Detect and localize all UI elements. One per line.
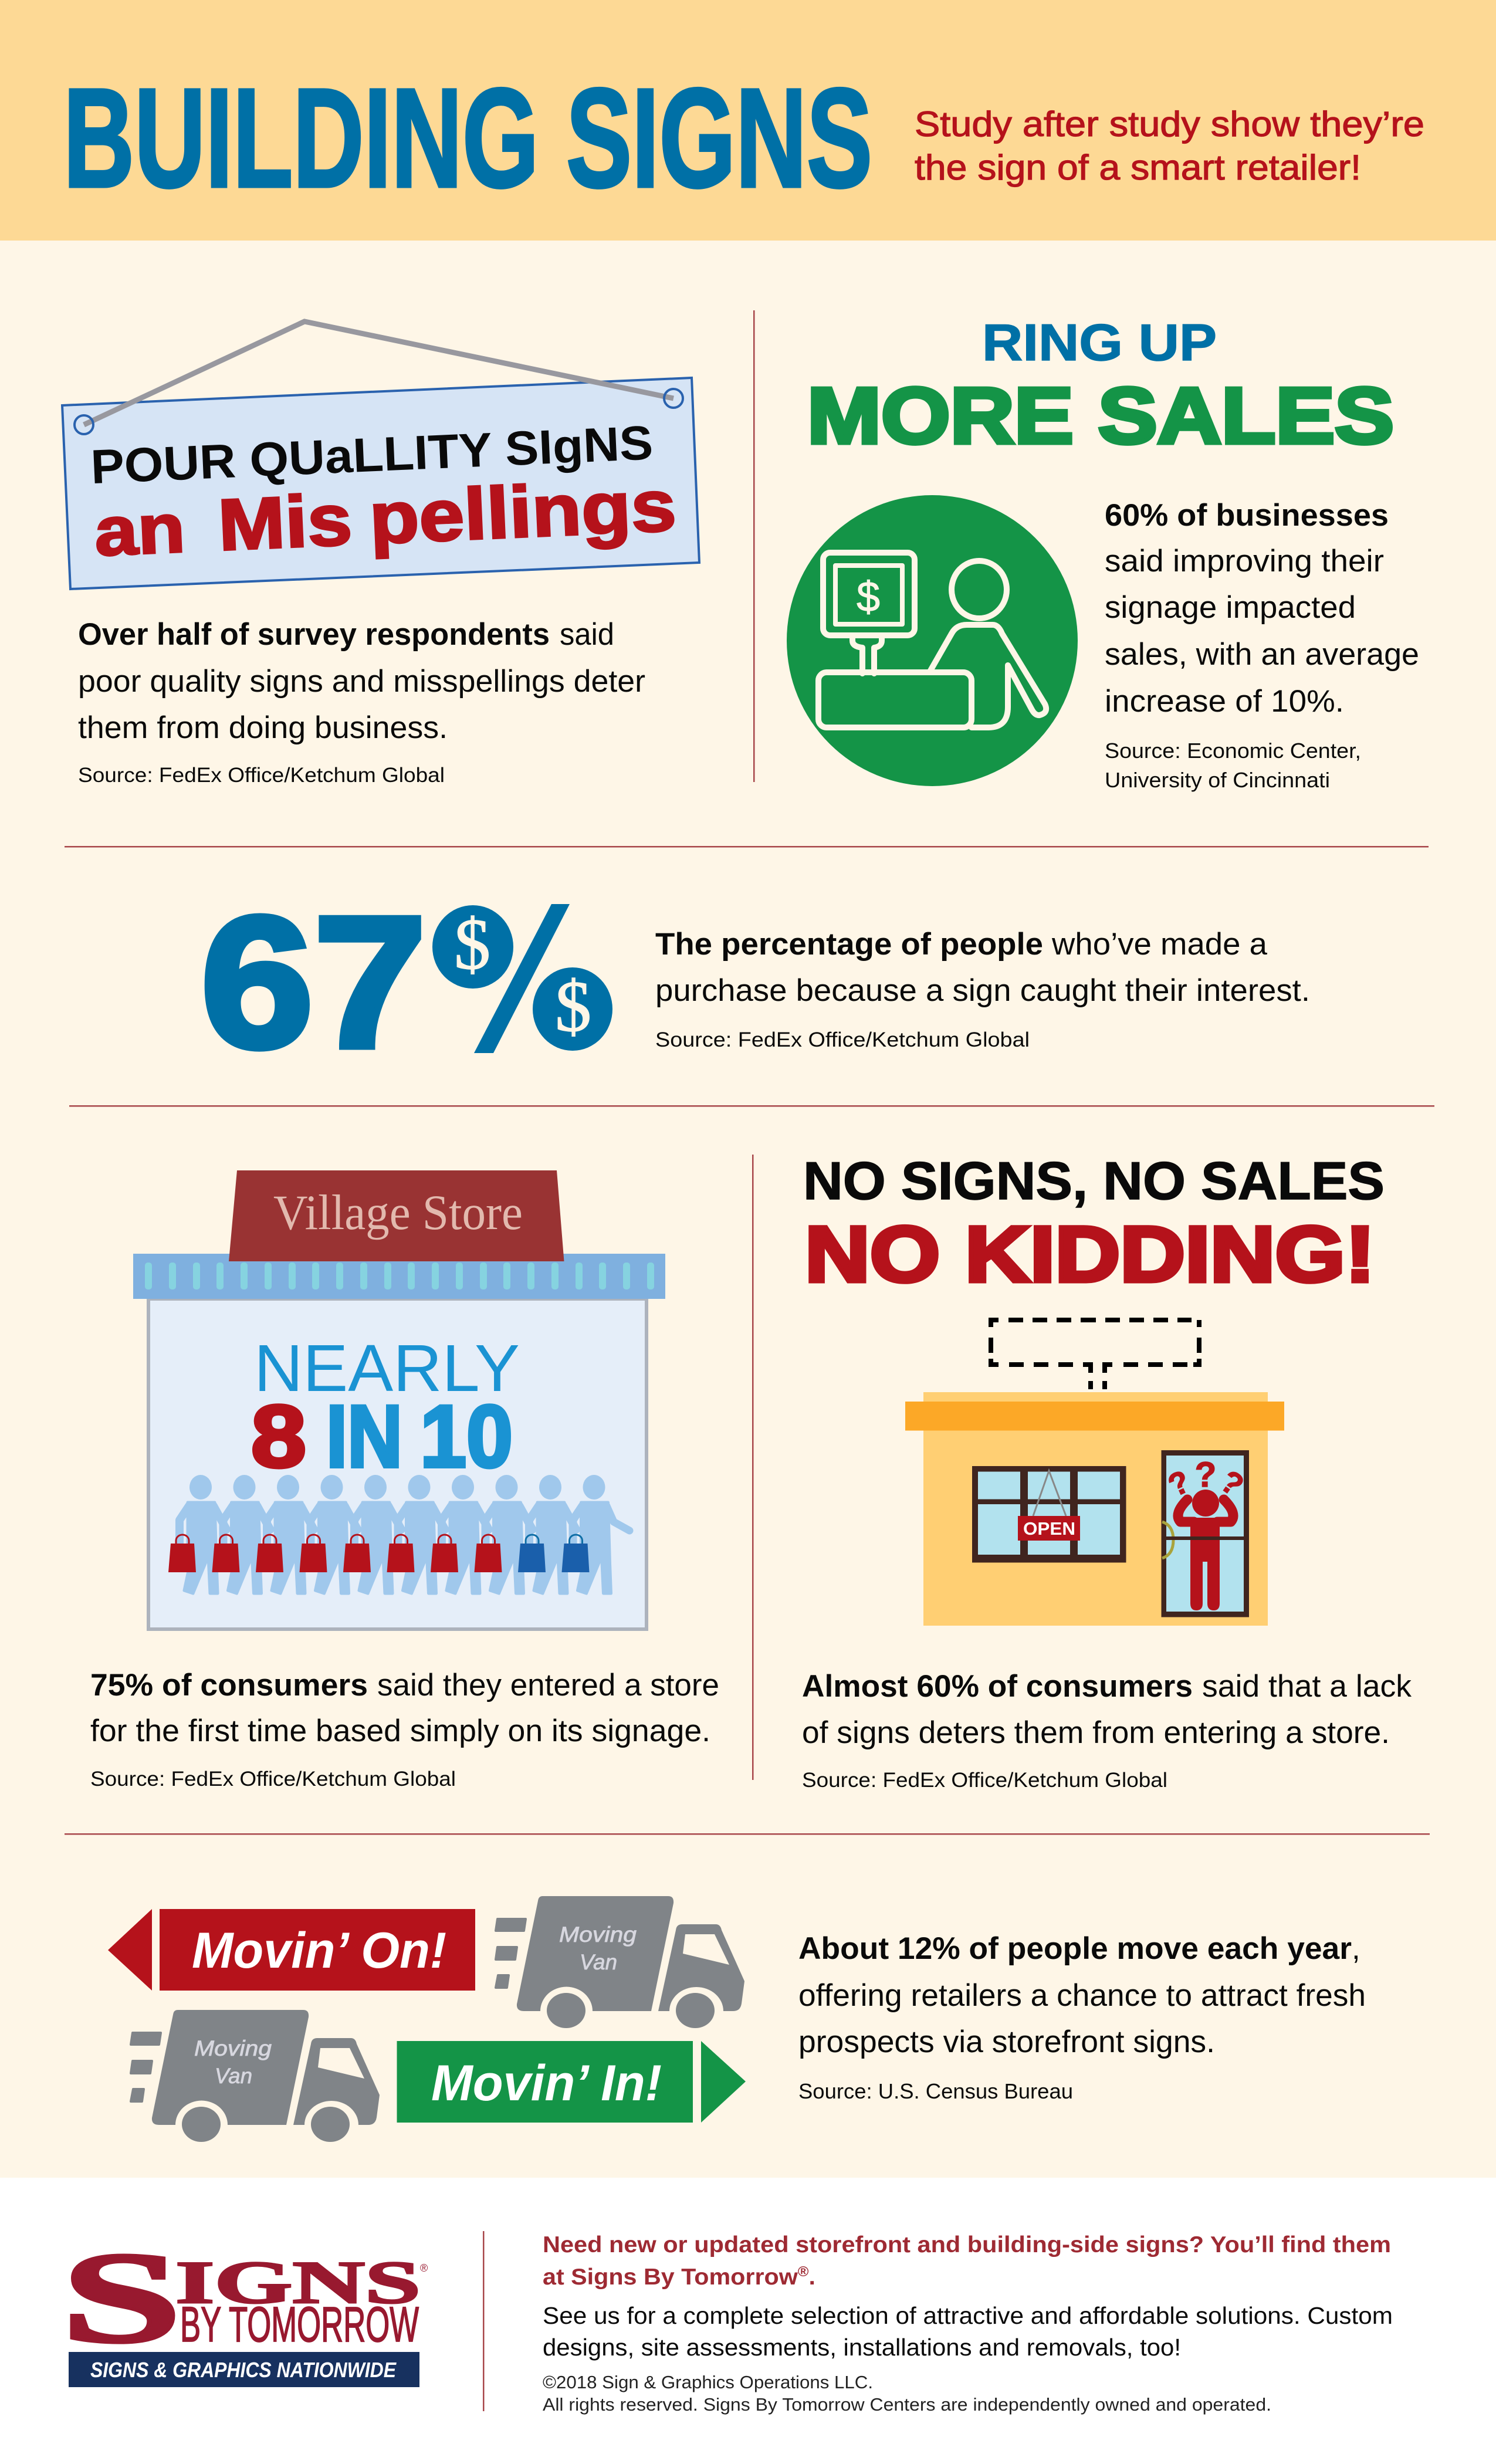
text block: 75% of consumers: 75% of consumers	[90, 1668, 368, 1703]
text block: about 12%	[798, 1931, 1366, 2103]
sign line two: an	[93, 489, 187, 571]
text block: almost 60% of consumers: Source: FedEx Office/Ketchum Global	[802, 1769, 1167, 1792]
text block: about 12%: ,	[1352, 1931, 1360, 1966]
icon: moving van top: Van	[580, 1950, 617, 1974]
door	[1162, 1450, 1249, 1617]
text block: 75% of consumers: said they entered a store	[377, 1668, 719, 1703]
statistic: 67 percent with dollar signs: 67	[201, 878, 427, 1087]
logo: signs by tomorrow: ®	[420, 2262, 428, 2274]
text block: about 12%: About 12% of people move each year	[798, 1931, 1352, 1966]
icon: moving van bottom: Van	[215, 2064, 252, 2088]
divider: above moving panel	[65, 1833, 1430, 1835]
icon: moving van bottom: Moving	[194, 2036, 272, 2060]
illustration: unsigned store	[905, 1320, 1284, 1626]
divider: above 67 percent	[65, 846, 1429, 847]
arrow: movin on	[108, 1909, 475, 1991]
store awning	[133, 1254, 665, 1299]
confused person: ?	[1195, 1455, 1216, 1494]
building awning	[905, 1402, 1284, 1430]
footer background	[0, 2178, 1496, 2464]
heading: ring up more sales: MORE SALES	[807, 371, 1394, 460]
text block: 67 percent description: The percentage of people	[655, 927, 1043, 962]
confused person: ?	[1163, 1464, 1195, 1504]
text block: footer call to action: ©2018 Sign & Graphics Operations LLC.	[543, 2372, 873, 2392]
text block: footer call to action	[543, 2232, 1393, 2415]
text block: 60% of businesses	[1105, 498, 1419, 792]
text block: 75% of consumers: for the first time based simply on its signage.	[90, 1714, 710, 1748]
text block: 60% of businesses: Source: Economic Center,	[1105, 739, 1361, 763]
text block: footer call to action: Need new or updated storefront and building-side signs? You’ll find them	[543, 2232, 1391, 2257]
subtitle: the sign of a smart retailer!	[915, 148, 1361, 187]
text block: 60% of businesses: said improving their	[1105, 544, 1384, 578]
text block: 67 percent description: purchase because a sign caught their interest.	[655, 973, 1310, 1008]
logo: signs by tomorrow: SIGNS & GRAPHICS NATIONWIDE	[90, 2358, 397, 2382]
building wall	[923, 1392, 1268, 1626]
text block: misspellings stat: them from doing business.	[78, 710, 448, 745]
nearly 8 in 10 heading: IN	[326, 1387, 402, 1485]
heading: no signs no sales no kidding	[803, 1152, 1385, 1298]
heading: no signs no sales no kidding: NO KIDDING!	[805, 1211, 1375, 1298]
divider: top panels	[753, 310, 754, 782]
text block: footer call to action: ®	[798, 2264, 809, 2280]
subtitle: Study after study show they’re	[915, 104, 1424, 144]
divider: footer	[483, 2231, 485, 2411]
heading: ring up more sales	[807, 313, 1394, 460]
logo: signs by tomorrow: BY TOMORROW	[180, 2297, 419, 2352]
subtitle	[915, 104, 1424, 187]
nearly 8 in 10 heading	[251, 1331, 520, 1485]
text block: 60% of businesses: signage impacted	[1105, 590, 1356, 625]
text block: footer call to action: at Signs By Tomorrow	[543, 2265, 784, 2290]
text block: footer call to action: See us for a complete selection of attractive and affordable solutions. Custom	[543, 2302, 1393, 2329]
icon: cashier in green circle: $	[857, 574, 880, 621]
divider: above store panels	[69, 1105, 1434, 1106]
arrow: movin in	[397, 2041, 746, 2123]
panel: misspelled sign	[62, 321, 699, 589]
text block: 75% of consumers: Source: FedEx Office/Ketchum Global	[90, 1768, 456, 1791]
statistic: 67 percent with dollar signs: $	[555, 966, 591, 1047]
window	[972, 1466, 1126, 1563]
text block: misspellings stat: Source: FedEx Office/Ketchum Global	[78, 764, 445, 787]
icon: cashier in green circle	[787, 495, 1078, 786]
sign line one: POUR QUaLLITY SIgNS	[90, 416, 654, 494]
text block: 67 percent description: who’ve made a	[1051, 927, 1268, 962]
sign line two: Mis	[216, 479, 354, 566]
statistic: 67 percent with dollar signs	[201, 878, 612, 1087]
text block: misspellings stat: said	[560, 617, 614, 652]
illustration: village store	[133, 1170, 665, 1629]
text block: 60% of businesses: 60% of businesses	[1105, 498, 1389, 533]
text block: almost 60% of consumers: Almost 60% of consumers	[802, 1669, 1193, 1704]
nearly 8 in 10 heading: 10	[420, 1387, 513, 1485]
confused person	[1163, 1455, 1250, 1610]
row of ten shoppers	[168, 1475, 629, 1593]
nearly 8 in 10 heading: 8	[251, 1387, 306, 1485]
sign line two: pellings	[368, 465, 678, 560]
text block: misspellings stat: Over half of survey respondents	[78, 617, 550, 652]
open sign	[1018, 1516, 1080, 1541]
text block: 67 percent description	[655, 927, 1310, 1051]
icon: moving van top: Moving	[559, 1923, 637, 1947]
nearly 8 in 10 heading: NEARLY	[254, 1331, 520, 1405]
open sign: OPEN	[1023, 1518, 1075, 1539]
text block: footer call to action: designs, site assessments, installations and removals, too!	[543, 2334, 1181, 2361]
title: BUILDING SIGNS	[63, 59, 872, 216]
arrow: movin on: Movin’ On!	[192, 1923, 446, 1979]
arrow: movin in: Movin’ In!	[431, 2055, 662, 2111]
text block: about 12%: offering retailers a chance to attract fresh	[798, 1978, 1366, 2013]
sign board	[62, 378, 699, 589]
text block: 60% of businesses: University of Cincinnati	[1105, 768, 1330, 792]
divider: store panels	[752, 1155, 753, 1780]
text block: footer call to action: All rights reserved. Signs By Tomorrow Centers are independently owned and operated.	[543, 2394, 1271, 2415]
text block: 60% of businesses: increase of 10%.	[1105, 684, 1344, 719]
statistic: 67 percent with dollar signs: $	[454, 904, 490, 984]
confused person: ?	[1214, 1464, 1250, 1504]
text block: almost 60% of consumers	[802, 1669, 1412, 1792]
text block: 60% of businesses: sales, with an average	[1105, 637, 1419, 672]
logo: signs by tomorrow	[61, 2226, 428, 2387]
store body	[148, 1299, 647, 1629]
icon: moving van top	[496, 1896, 744, 2028]
grommets	[75, 389, 683, 434]
text block: about 12%: Source: U.S. Census Bureau	[798, 2079, 1073, 2103]
text block: 75% of consumers	[90, 1668, 719, 1791]
text block: almost 60% of consumers: said that a lack	[1202, 1669, 1412, 1704]
icon: moving van bottom	[131, 2010, 380, 2142]
text block: misspellings stat	[78, 617, 645, 787]
text block: almost 60% of consumers: of signs deters them from entering a store.	[802, 1715, 1390, 1750]
heading: ring up more sales: RING UP	[982, 313, 1217, 371]
store name sign	[229, 1170, 564, 1261]
header band	[0, 0, 1496, 241]
text block: footer call to action: .	[809, 2265, 815, 2290]
hanging string	[84, 321, 673, 425]
logo: signs by tomorrow: S	[61, 2226, 182, 2370]
heading: no signs no sales no kidding: NO SIGNS, NO SALES	[803, 1152, 1385, 1211]
text block: 67 percent description: Source: FedEx Office/Ketchum Global	[655, 1028, 1030, 1051]
text block: about 12%: prospects via storefront signs.	[798, 2025, 1215, 2059]
store name sign: Village Store	[273, 1185, 523, 1240]
missing sign outline	[991, 1320, 1199, 1389]
text block: misspellings stat: poor quality signs and misspellings deter	[78, 664, 645, 699]
sign line two	[93, 465, 678, 571]
logo: signs by tomorrow: IGNS	[175, 2249, 421, 2316]
